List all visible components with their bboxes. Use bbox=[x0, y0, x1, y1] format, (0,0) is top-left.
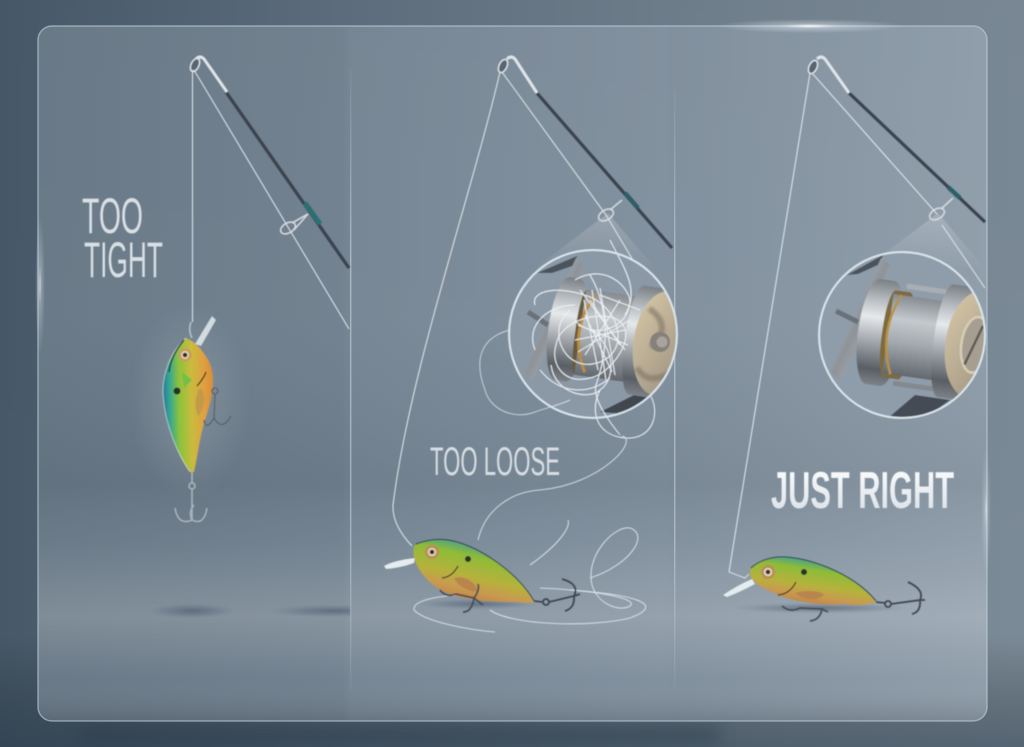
lure: lying limp bbox=[384, 540, 580, 612]
heading: too tight bbox=[82, 188, 163, 288]
treble hook: belly bbox=[782, 606, 828, 621]
panel 2: too loose bbox=[384, 57, 695, 632]
lure: vertical, too tight bbox=[128, 300, 252, 522]
fishing rod 1 bbox=[188, 57, 349, 268]
treble hook: belly bbox=[440, 584, 483, 612]
panel 1: too tight bbox=[82, 54, 351, 616]
fishing lines 1 bbox=[192, 70, 349, 329]
fishing lines 2 bbox=[393, 72, 640, 546]
tangled line bbox=[533, 240, 655, 438]
reel inset: tangled spool bbox=[480, 240, 695, 438]
fishing rod 3 bbox=[806, 57, 985, 222]
floor shadows bbox=[160, 606, 350, 616]
lure: natural pose bbox=[723, 557, 925, 621]
fishing lines 3 bbox=[729, 73, 985, 572]
treble hook: tail bbox=[876, 582, 925, 614]
treble hook: belly bbox=[204, 388, 231, 426]
heading: too tight: TOO bbox=[82, 188, 143, 244]
light cone 2 bbox=[535, 213, 655, 268]
panel 3: just right bbox=[723, 57, 1017, 621]
treble hook: tail bbox=[175, 472, 207, 522]
loose line coils bbox=[414, 436, 646, 632]
heading: too loose: TOO LOOSE bbox=[430, 440, 560, 484]
light cone 3 bbox=[865, 213, 985, 268]
treble hook: tail bbox=[534, 579, 580, 611]
reel inset: neat spool bbox=[818, 250, 986, 420]
fishing rod 2 bbox=[496, 57, 672, 248]
heading: too tight: TIGHT bbox=[84, 232, 163, 288]
